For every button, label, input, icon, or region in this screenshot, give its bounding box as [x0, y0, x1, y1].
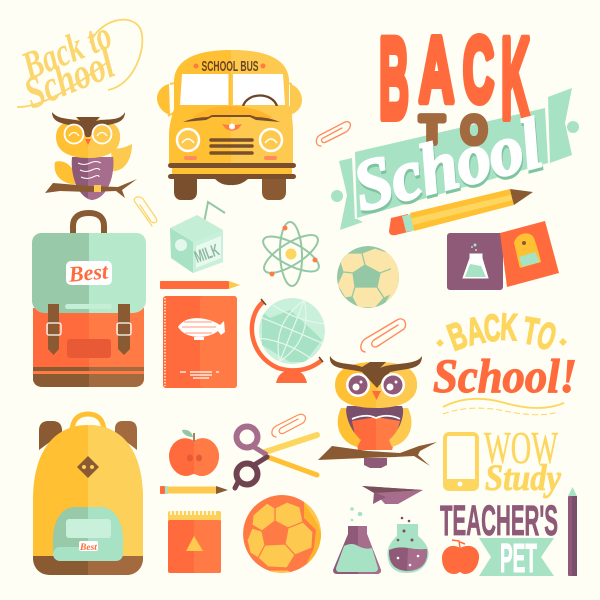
headline: BACK: C [463, 19, 494, 121]
side straps [39, 421, 62, 450]
steering wheel [243, 96, 277, 106]
arched Back To [442, 305, 561, 359]
headline: School script: School [347, 106, 550, 230]
owl reading a book [318, 356, 437, 468]
owl brow [330, 356, 422, 388]
PET ribbon: PET [500, 535, 537, 581]
flap [32, 233, 146, 313]
scissors [235, 426, 317, 488]
owl on branch, small [45, 112, 137, 200]
globe [252, 296, 330, 383]
branch [318, 442, 437, 466]
paperclip, top centre [316, 122, 350, 146]
purple pencil [568, 487, 577, 576]
base [33, 556, 143, 575]
wheels [174, 179, 197, 200]
paperclip, yellow [134, 197, 157, 226]
tile: flask on purple [447, 233, 503, 290]
backpack body [33, 308, 144, 387]
bus badge [222, 124, 242, 131]
apple, small [442, 540, 479, 574]
backpack, yellow [33, 414, 143, 575]
backpack, yellow: Best [79, 543, 97, 553]
top handle [72, 414, 104, 432]
wavy rule [443, 399, 564, 408]
school bus [157, 50, 302, 200]
arched Back To: C [482, 307, 502, 350]
arched Back To: K [499, 305, 519, 349]
headline: BACK: A [419, 19, 454, 121]
soccer ball, mint [337, 246, 400, 308]
apple [169, 430, 219, 476]
atom [258, 222, 324, 286]
bumper [168, 163, 296, 168]
notepad with triangle [168, 508, 221, 573]
headline: School script: School [346, 103, 549, 227]
tablet phone icon [444, 434, 478, 490]
bus mirrors [157, 82, 302, 116]
globe stand [252, 302, 322, 370]
bus front body [169, 106, 293, 163]
arched Back To: B [442, 312, 473, 359]
school bus sign: SCHOOL BUS [202, 58, 258, 75]
script lettering: Back to School: Back to [15, 12, 118, 89]
diamond clasp [77, 456, 99, 478]
headlights [177, 129, 199, 151]
text: K [501, 15, 530, 143]
headline: TO: T [420, 109, 444, 152]
strap left [48, 304, 59, 355]
body [33, 425, 143, 558]
milk carton: MILK [192, 240, 222, 267]
grille [211, 140, 252, 153]
round flask [387, 517, 429, 573]
small yellow pencil [160, 486, 228, 494]
owl wings [338, 408, 361, 447]
School!: School! [433, 350, 577, 403]
tile: backpack on orange [500, 221, 559, 287]
milk carton [170, 202, 225, 273]
headline: BACK: B [379, 15, 409, 143]
small orange pencil [160, 281, 240, 289]
headline ribbon [331, 88, 579, 230]
arched Back To: T [520, 308, 542, 353]
owl body [345, 406, 404, 440]
strap right [118, 304, 130, 355]
headline: BACK [379, 15, 530, 143]
owl eyes [346, 373, 370, 397]
Study: Study [485, 458, 562, 499]
pocket [53, 507, 123, 561]
lockup: Back to School! [433, 305, 577, 415]
backpack, mint and orange [32, 213, 146, 387]
conical flask [333, 507, 381, 574]
headline: TO [420, 109, 487, 152]
paperclip, orange by scissors [272, 414, 305, 437]
pocket [67, 339, 111, 358]
owl book [352, 416, 400, 450]
soccer ball, orange [243, 495, 322, 575]
paperclip, above owl [361, 319, 406, 352]
bus roof [174, 50, 289, 110]
script lettering: Back to School: School [17, 38, 122, 118]
Best tag [66, 261, 112, 285]
arched Back To: A [462, 308, 488, 354]
WOW: WOW [484, 423, 558, 473]
owl head [335, 362, 417, 408]
headline: TO: O [461, 109, 487, 152]
arched Back To: O [532, 313, 561, 359]
paper plane [362, 486, 423, 504]
bus windows [180, 74, 285, 105]
backpack base [33, 367, 144, 387]
handle [73, 213, 104, 233]
backpack, mint and orange: Best [67, 258, 110, 287]
owl feet [364, 458, 387, 468]
spiral notebook with airship [163, 296, 237, 388]
PET ribbon [479, 535, 554, 581]
big pencil [389, 189, 533, 235]
